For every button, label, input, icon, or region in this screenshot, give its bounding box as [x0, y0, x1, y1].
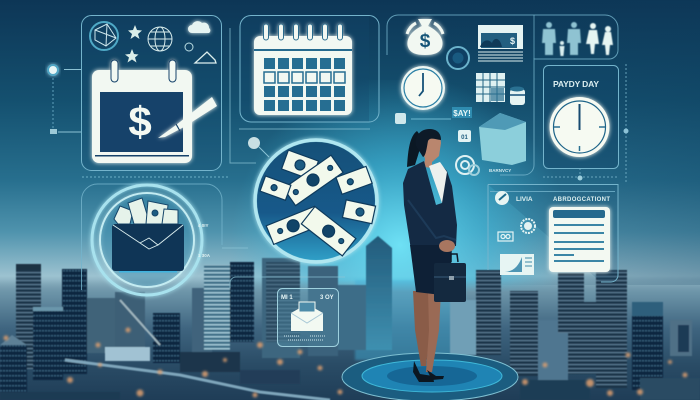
- icon: stars: [125, 25, 142, 62]
- shoes: [413, 361, 444, 382]
- icon: logo badge: [495, 191, 509, 205]
- icon: ticket: [498, 232, 513, 241]
- legs: [413, 291, 441, 372]
- hands: [439, 240, 455, 252]
- head and hair: [416, 129, 441, 168]
- label: MI 1: MI 1: [281, 295, 293, 301]
- panel: agreement document: [488, 184, 618, 282]
- connector nodes left: [48, 65, 230, 177]
- icon: money bag: $: [420, 31, 431, 52]
- panel: money circle: [222, 28, 377, 288]
- panel: payday clock: [543, 64, 628, 184]
- icon: speech bubble: 01: [461, 135, 468, 141]
- icon: house outline: [195, 52, 216, 63]
- icon: small badge: [185, 43, 193, 51]
- icon: database: [510, 86, 525, 105]
- skirt: [410, 245, 452, 296]
- icon: small square with arrow: [395, 113, 451, 124]
- icon: shaded box: [479, 113, 526, 165]
- figure: businesswoman: [403, 129, 466, 382]
- icon: spreadsheet: [476, 73, 505, 102]
- icon: calendar with dollar sign: [92, 60, 192, 163]
- label: DAY callout: $AY!: [453, 109, 471, 118]
- label: LIVIA: LIVIA: [516, 196, 533, 203]
- icon: small dial: [447, 47, 469, 69]
- label: date ticks: 1 30A: [198, 253, 211, 258]
- icon: pen: [158, 97, 217, 138]
- icon: calendar with dollar sign: $: [128, 98, 152, 145]
- panel: budget and clock icons: [387, 15, 618, 175]
- icon: banknote photo card: $: [510, 36, 515, 46]
- blouse: [429, 162, 447, 203]
- icon: cloud: [188, 21, 210, 33]
- ponytail: [407, 131, 423, 167]
- icon: banknotes: [260, 150, 376, 256]
- label: ABRDOGCATIONT: ABRDOGCATIONT: [553, 197, 610, 203]
- icon: banknotes in envelope: [114, 198, 178, 224]
- icon: money bag: [407, 19, 443, 55]
- icon: globe network: [90, 22, 118, 50]
- icon: gear badge: [521, 219, 535, 233]
- icon: globe: [148, 27, 172, 51]
- panel: month calendar: [240, 16, 379, 122]
- jacket: [403, 161, 457, 250]
- label: date ticks: [198, 223, 211, 258]
- icon: calendar grid: [254, 24, 352, 115]
- arms: [408, 200, 456, 240]
- icon: chart card: [500, 254, 534, 275]
- city skyline: [0, 236, 700, 400]
- hologram platform: [342, 353, 518, 400]
- panel: envelope circle: [82, 184, 222, 295]
- city lights: [4, 328, 688, 398]
- label: date ticks: 4 0IY: [198, 223, 209, 228]
- icon: document: [549, 207, 610, 272]
- panel: small envelope card: [278, 288, 338, 346]
- heading: PAYDY DAY: PAYDY DAY: [553, 79, 599, 89]
- icon: banknote photo card: [478, 25, 523, 61]
- icon row: people: [542, 22, 613, 56]
- icon: open envelope: [291, 302, 323, 331]
- icon: large clock: [550, 97, 610, 157]
- icon: clock: [401, 66, 445, 110]
- icon: speech bubble: [458, 130, 471, 142]
- label: 3 OY: 3 OY: [320, 295, 334, 301]
- icon: target badges: [456, 156, 479, 175]
- briefcase: [434, 254, 466, 302]
- panel: salary calendar: [82, 16, 222, 170]
- label: BARNVCY: BARNVCY: [489, 168, 511, 173]
- icon: envelope: [112, 224, 184, 272]
